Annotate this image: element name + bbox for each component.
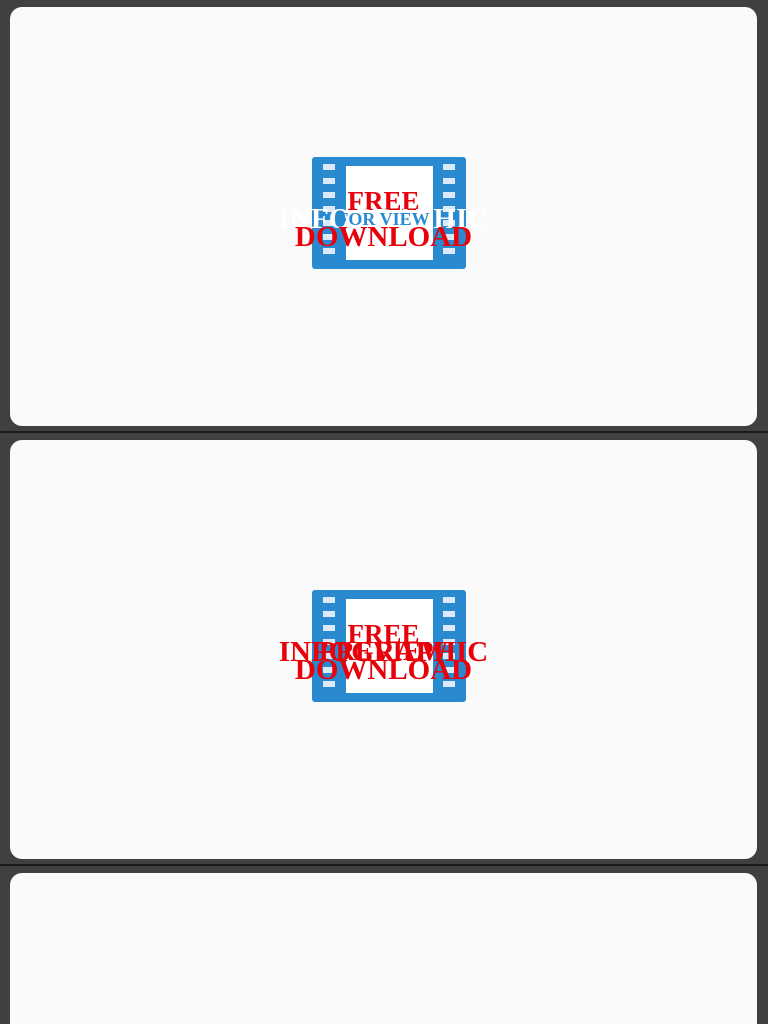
text: free: FREE [347, 619, 420, 649]
card 2 [10, 440, 757, 859]
text: free: FREE [347, 186, 420, 216]
text: preview: FOR VIEW [337, 209, 430, 229]
text: infographic: INFOGRAPHIC [279, 636, 488, 668]
text: download: DOWNLOAD [295, 221, 472, 253]
icon: film strip [312, 157, 466, 269]
text: preview: PREVIEW [319, 636, 448, 666]
text: infographic: INFOGRAPHIC [279, 203, 488, 235]
card 3 [10, 873, 757, 1024]
icon: film strip [312, 590, 466, 702]
card 1 [10, 7, 757, 426]
text: download: DOWNLOAD [295, 654, 472, 686]
